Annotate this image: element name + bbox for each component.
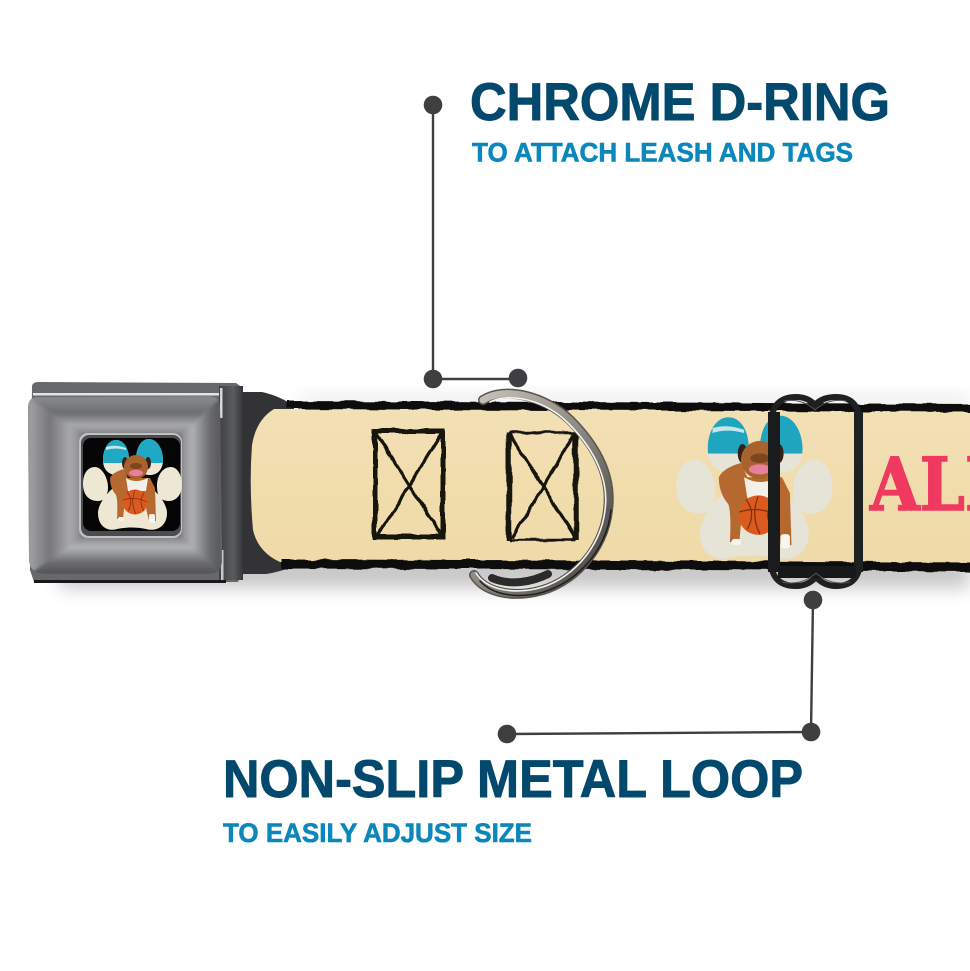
main face with mitred bevels <box>26 395 224 577</box>
subheading: attach leash: TO ATTACH LEASH AND TAGS <box>472 138 853 168</box>
infographic <box>28 82 970 842</box>
dog illustration <box>719 441 791 548</box>
stitched box 1 <box>375 431 443 537</box>
non-slip metal loop <box>771 397 860 586</box>
window frame <box>79 433 182 538</box>
strap body <box>251 409 970 565</box>
window black background <box>83 438 180 531</box>
heading: non-slip metal loop: NON-SLIP METAL LOOP <box>223 750 803 809</box>
bottom edge <box>34 580 226 583</box>
callout: metal loop leader line <box>498 591 822 743</box>
top plate <box>30 382 243 582</box>
chrome D-ring <box>474 394 611 595</box>
collar strap <box>243 392 970 574</box>
drop shadow under strap <box>60 556 970 588</box>
icon: paw print in buckle <box>83 439 182 530</box>
callout: D-ring leader line <box>424 96 527 388</box>
black strap edges <box>282 405 970 567</box>
metal seatbelt buckle <box>26 382 243 583</box>
stitched box 2 <box>509 433 576 540</box>
heading: chrome D-ring: CHROME D-RING <box>470 73 890 132</box>
subheading: adjust size: TO EASILY ADJUST SIZE <box>223 818 532 848</box>
webbing behind buckle <box>243 392 294 574</box>
dog illustration <box>110 455 156 523</box>
side slot <box>219 386 243 580</box>
icon: paw print on strap <box>676 416 832 559</box>
